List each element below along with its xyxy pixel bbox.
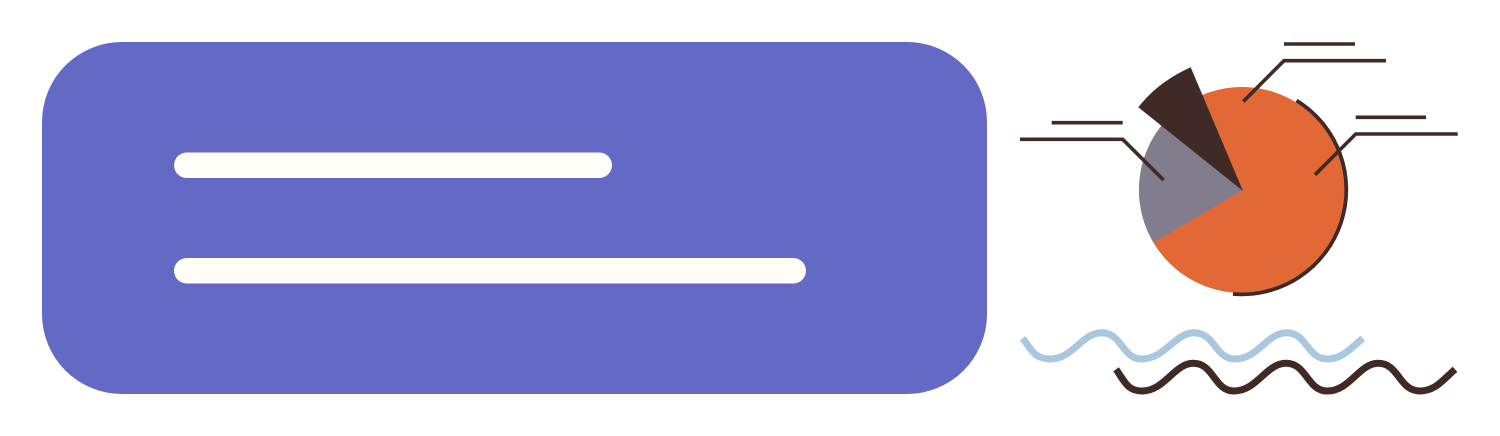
text placeholder bar: short [174,152,612,178]
callout: left [1020,123,1164,180]
text placeholder bar: long [174,258,806,284]
wave: light blue [1023,333,1363,359]
pie slice: orange base [1139,87,1345,293]
wave: dark brown [1116,363,1455,391]
pie slice: dark exploded wedge [1138,67,1243,191]
panel: blue rounded card [42,42,987,394]
pie slice: grey [1139,126,1242,243]
outer arc accent [1233,100,1346,294]
pie chart with callouts [1020,44,1458,294]
callout: top [1243,44,1386,102]
callout: right [1315,117,1458,175]
